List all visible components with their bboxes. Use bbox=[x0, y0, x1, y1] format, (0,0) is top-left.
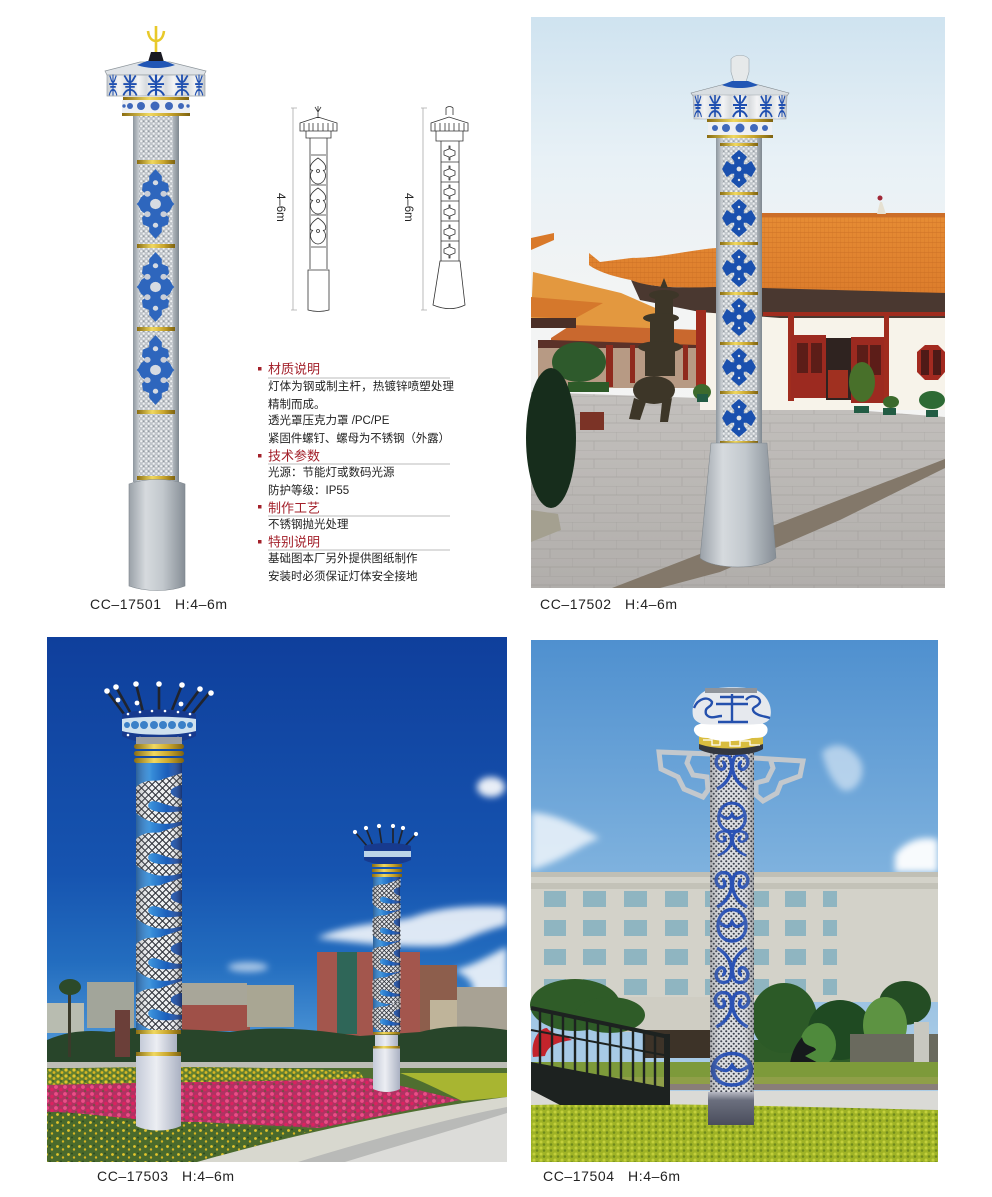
spec text panel bbox=[258, 362, 454, 583]
courtyard pavement bbox=[531, 392, 945, 588]
base bbox=[136, 1030, 181, 1130]
section: craft: 不锈钢抛光处理 bbox=[268, 517, 349, 531]
height label: 4–6m bbox=[402, 193, 414, 222]
right yellow-green lawn bbox=[400, 1073, 507, 1101]
section: material: 材质说明 bbox=[268, 362, 320, 376]
lawn and path bbox=[531, 1062, 938, 1162]
lamp drum with blue motifs bbox=[107, 75, 205, 96]
hotel building bbox=[531, 872, 938, 1058]
drum bbox=[693, 95, 787, 119]
pink flower bed bbox=[47, 1078, 460, 1128]
globe bbox=[693, 687, 771, 725]
crown arms bbox=[107, 684, 210, 714]
clouds bbox=[228, 777, 507, 997]
crown arms bbox=[355, 826, 416, 846]
section: technical parameters: 防护等级：IP55 bbox=[268, 483, 349, 497]
collar bbox=[707, 119, 773, 138]
lamp mesh column bbox=[133, 116, 179, 482]
dark ring under globe bbox=[699, 743, 763, 755]
rock pavilion, sign and sculpture bbox=[774, 1022, 938, 1074]
section: craft bbox=[258, 500, 450, 531]
lamp large CC-17503 bbox=[104, 681, 214, 1130]
main temple hall bbox=[589, 196, 945, 410]
back-left temple roofs and hall bbox=[531, 233, 698, 388]
photo: CC-17504 hotel lawn bbox=[530, 640, 938, 1162]
skyline buildings bbox=[47, 952, 507, 1036]
lamp roof bbox=[105, 62, 206, 75]
section: special notes: 基础图本厂另外提供图纸制作 bbox=[268, 551, 418, 565]
octagon window bbox=[917, 345, 945, 380]
photo: CC-17503 city park at blue sky bbox=[47, 637, 507, 1162]
height dimension line bbox=[421, 108, 427, 310]
yellow flower band bbox=[47, 1067, 368, 1086]
caption 17501: CC–17501 H:4–6m bbox=[90, 596, 227, 612]
incense burner bbox=[629, 278, 682, 422]
ridge ornament bbox=[877, 202, 886, 214]
shrubs and tree bbox=[526, 342, 945, 542]
base bbox=[708, 1092, 754, 1125]
caption 17503: CC–17503 H:4–6m bbox=[97, 1168, 234, 1184]
caption 17502: CC–17502 H:4–6m bbox=[540, 596, 677, 612]
red box bbox=[580, 412, 604, 430]
wing brackets bbox=[659, 752, 803, 801]
section: material: 紧固件螺钉、螺母为不锈钢（外露） bbox=[268, 431, 450, 445]
section: material: 灯体为钢或制主杆，热镀锌喷塑处理 bbox=[268, 379, 454, 393]
pearl row bbox=[694, 721, 768, 741]
height dimension line bbox=[291, 108, 297, 310]
column bbox=[710, 748, 754, 1093]
section: technical parameters: 光源：节能灯或数码光源 bbox=[268, 465, 395, 479]
curb and paved road bbox=[197, 1097, 507, 1162]
trees bbox=[530, 979, 938, 1067]
finial bbox=[731, 55, 749, 82]
section: special notes bbox=[258, 534, 450, 583]
crown band bbox=[122, 710, 196, 744]
lamp CC-17502 bbox=[691, 55, 789, 567]
section: special notes: 安装时必须保证灯体安全接地 bbox=[268, 569, 418, 583]
railing and stairs bbox=[531, 1008, 670, 1105]
column bbox=[716, 138, 762, 447]
clouds bbox=[531, 745, 938, 872]
crown band bbox=[364, 843, 411, 864]
gold key band bbox=[699, 733, 763, 748]
section: material bbox=[258, 362, 454, 445]
section: material: 透光罩压克力罩 /PC/PE bbox=[268, 413, 390, 427]
tapered base bbox=[700, 443, 776, 567]
section: craft: 制作工艺 bbox=[268, 500, 320, 516]
lamp base bbox=[129, 480, 185, 590]
tree line bbox=[47, 1026, 507, 1064]
product image: CC-17501 lamp bbox=[105, 26, 206, 590]
lamp small CC-17503 bbox=[353, 824, 418, 1092]
caption 17504: CC–17504 H:4–6m bbox=[543, 1168, 680, 1184]
base bbox=[373, 1032, 400, 1092]
front flower band bbox=[47, 1112, 315, 1162]
crown lights bbox=[353, 824, 418, 836]
red sculpture bbox=[532, 1028, 572, 1057]
height label: 4–6m bbox=[274, 193, 286, 222]
lamp collar with dots bbox=[122, 97, 190, 116]
roof bbox=[691, 84, 789, 96]
road strip and lawns bbox=[47, 1062, 507, 1070]
lamp CC-17504 bbox=[659, 687, 803, 1125]
gold rings bbox=[134, 737, 184, 763]
column bbox=[372, 877, 400, 1033]
section: technical parameters: 技术参数 bbox=[268, 448, 320, 464]
line drawing: 17502 elevation bbox=[402, 106, 468, 310]
section: special notes: 特别说明 bbox=[268, 534, 320, 550]
blue wave column bbox=[136, 763, 182, 1032]
section: material: 精制而成。 bbox=[268, 398, 326, 411]
section: technical parameters bbox=[258, 448, 450, 497]
monument and palm bbox=[59, 979, 130, 1057]
lamp trident finial bbox=[148, 26, 164, 62]
photo: CC-17502 temple courtyard bbox=[526, 17, 945, 588]
rings bbox=[372, 864, 402, 877]
line drawing: 17501 elevation bbox=[274, 106, 337, 312]
crown lights bbox=[104, 681, 214, 706]
